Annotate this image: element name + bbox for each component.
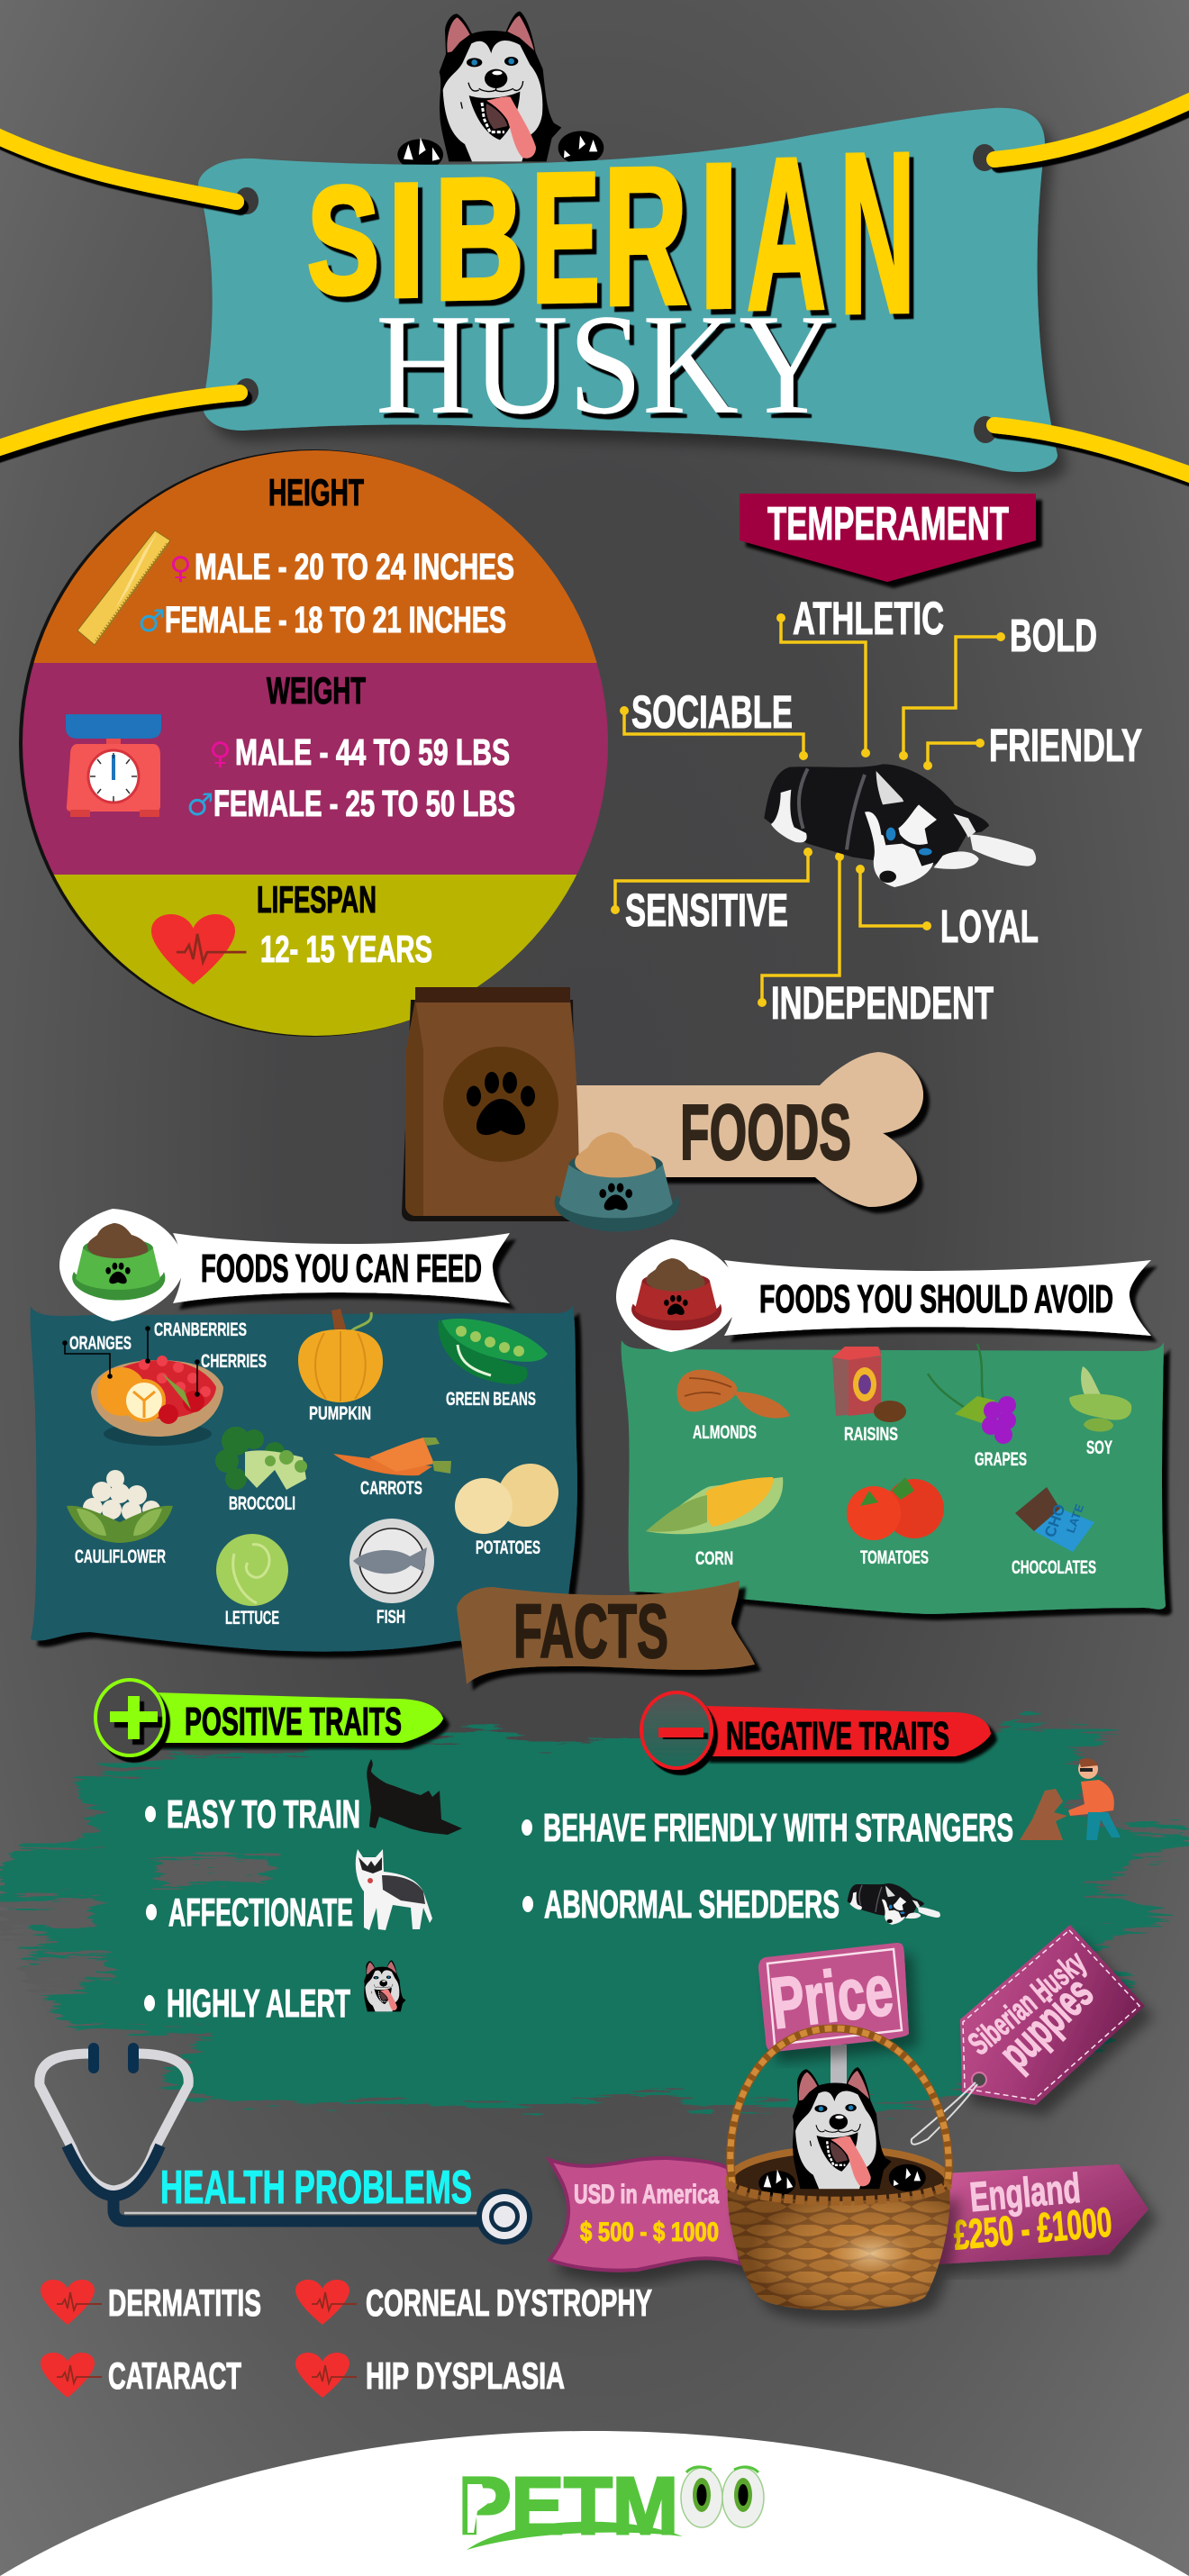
bone label: FOODS bbox=[680, 1089, 851, 1176]
female weight: FEMALE - 25 TO 50 LBS bbox=[213, 783, 515, 824]
pumpkin: PUMPKIN bbox=[309, 1403, 371, 1424]
carrots: CARROTS bbox=[360, 1478, 422, 1499]
cauliflower bbox=[67, 1470, 173, 1567]
temperament trait labels and connectors bbox=[611, 593, 1142, 1029]
weight heading: WEIGHT bbox=[267, 669, 366, 712]
icon: shedding puppy bbox=[848, 1883, 940, 1925]
facts brush background bbox=[0, 1719, 1189, 2111]
icon: standing husky bbox=[356, 1849, 432, 1930]
cherries label: CHERRIES bbox=[201, 1351, 267, 1372]
chocolate: LATE bbox=[1064, 1502, 1086, 1535]
corneal dystrophy bbox=[295, 2280, 652, 2325]
female height bbox=[138, 599, 506, 640]
cataract: CATARACT bbox=[108, 2354, 241, 2397]
usd flag bbox=[549, 2158, 740, 2271]
male height bbox=[169, 546, 514, 587]
basket interior bbox=[729, 2149, 948, 2214]
independent: INDEPENDENT bbox=[771, 977, 994, 1029]
almonds bbox=[677, 1370, 790, 1443]
female weight bbox=[186, 783, 515, 824]
easy to train: EASY TO TRAIN bbox=[167, 1792, 360, 1837]
bone label bbox=[576, 1052, 923, 1207]
husky in basket bbox=[758, 2067, 926, 2196]
loyal: LOYAL bbox=[940, 901, 1039, 952]
tag: siberian husky puppies: puppies bbox=[990, 1967, 1103, 2079]
soy: SOY bbox=[1086, 1438, 1112, 1458]
raisins box bbox=[832, 1347, 906, 1445]
stethoscope bbox=[40, 2043, 532, 2245]
basket bbox=[728, 2184, 950, 2310]
athletic bbox=[776, 593, 944, 757]
sensitive bbox=[611, 848, 812, 936]
dermatitis: DERMATITIS bbox=[108, 2281, 261, 2324]
title: SIBERIAN: S bbox=[307, 155, 379, 327]
cauliflower: CAULIFLOWER bbox=[75, 1547, 166, 1567]
icon: kitchen scale bbox=[66, 714, 161, 817]
banner: foods you can feed bbox=[173, 1233, 510, 1303]
banner: foods you should avoid bbox=[724, 1260, 1151, 1336]
chocolate bbox=[1012, 1487, 1096, 1578]
usd flag: $ 500 - $ 1000 bbox=[580, 2218, 719, 2247]
female height: FEMALE - 18 TO 21 INCHES bbox=[165, 599, 506, 640]
grapes: GRAPES bbox=[975, 1449, 1027, 1470]
pumpkin bbox=[298, 1309, 383, 1424]
icon: ruler bbox=[77, 531, 170, 645]
friendly bbox=[923, 720, 1142, 771]
soy bbox=[1069, 1366, 1131, 1458]
positive traits badge: POSITIVE TRAITS bbox=[185, 1700, 402, 1744]
england flag bbox=[937, 2164, 1148, 2264]
sensitive: SENSITIVE bbox=[625, 884, 788, 936]
tomatoes: TOMATOES bbox=[860, 1547, 929, 1568]
negative traits badge: NEGATIVE TRAITS bbox=[726, 1714, 949, 1758]
bold: BOLD bbox=[1010, 610, 1097, 661]
grapes bbox=[928, 1344, 1027, 1470]
male weight: ♀ bbox=[209, 736, 231, 772]
england flag: England bbox=[967, 2164, 1083, 2220]
hip dysplasia: HIP DYSPLASIA bbox=[366, 2354, 565, 2397]
price group bbox=[549, 1925, 1148, 2310]
foods heading: bag, bone, bowl bbox=[402, 987, 923, 1231]
temperament banner: TEMPERAMENT bbox=[767, 498, 1009, 550]
fruit bowl bbox=[91, 1356, 223, 1446]
hip dysplasia bbox=[295, 2353, 565, 2398]
height heading: HEIGHT bbox=[268, 471, 364, 513]
chocolate: CHOCOLATES bbox=[1012, 1557, 1096, 1578]
icon: husky head bbox=[364, 1960, 406, 2011]
fish on a plate: FISH bbox=[377, 1607, 405, 1628]
basket handle bbox=[731, 2028, 948, 2184]
dermatitis bbox=[41, 2280, 261, 2325]
title: SIBERIAN: E bbox=[531, 134, 600, 341]
fish on a plate bbox=[349, 1519, 434, 1628]
carrots bbox=[333, 1438, 451, 1499]
stats circle bbox=[0, 441, 631, 1046]
icon: black dog silhouette bbox=[367, 1759, 462, 1835]
husky puppy lying down bbox=[764, 764, 1036, 887]
icon: man shaking paw with dog bbox=[1020, 1758, 1121, 1840]
text: N bbox=[840, 104, 915, 361]
behave friendly with strangers bbox=[522, 1758, 1121, 1850]
usd flag: USD in America bbox=[574, 2180, 719, 2209]
sociable bbox=[620, 686, 808, 760]
facts ribbon: FACTS bbox=[513, 1589, 668, 1673]
footer white curve bbox=[0, 2431, 1189, 2576]
cranberries label: CRANBERRIES bbox=[154, 1320, 247, 1340]
raisins box: RAISINS bbox=[844, 1424, 898, 1445]
sociable: SOCIABLE bbox=[631, 686, 793, 738]
broccoli bbox=[215, 1427, 307, 1514]
icon: red bowl badge bbox=[616, 1239, 740, 1352]
title: SIBERIAN bbox=[307, 104, 915, 361]
green beans: GREEN BEANS bbox=[446, 1389, 536, 1410]
chocolate: CHO bbox=[1041, 1501, 1069, 1539]
male weight bbox=[209, 731, 510, 773]
male weight: MALE - 44 TO 59 LBS bbox=[235, 731, 510, 773]
panel: foods you can feed bbox=[31, 1306, 577, 1652]
lettuce: LETTUCE bbox=[225, 1608, 279, 1628]
highly alert bbox=[144, 1960, 406, 2026]
abnormal shedders: ABNORMAL SHEDDERS bbox=[544, 1882, 840, 1927]
potatoes bbox=[455, 1452, 571, 1558]
title: SIBERIAN: R bbox=[604, 126, 687, 347]
corneal dystrophy: CORNEAL DYSTROPHY bbox=[366, 2281, 652, 2324]
banner: foods you can feed: FOODS YOU CAN FEED bbox=[201, 1247, 482, 1291]
almonds: ALMONDS bbox=[693, 1422, 757, 1443]
facts ribbon bbox=[457, 1581, 755, 1684]
loyal bbox=[856, 865, 1039, 952]
corn bbox=[646, 1477, 783, 1569]
positive traits badge bbox=[95, 1680, 443, 1755]
panel: foods you should avoid bbox=[622, 1340, 1166, 1614]
title: SIBERIAN: I bbox=[698, 120, 740, 351]
title: SIBERIAN: I bbox=[387, 150, 425, 331]
broccoli: BROCCOLI bbox=[229, 1493, 295, 1514]
husky peeking above the banner bbox=[397, 12, 604, 170]
lettuce bbox=[216, 1534, 288, 1628]
yellow ropes bbox=[0, 97, 1189, 477]
female weight: ♂ bbox=[186, 787, 213, 823]
lifespan value: 12- 15 YEARS bbox=[260, 928, 432, 970]
affectionate bbox=[146, 1849, 432, 1935]
corn: CORN bbox=[695, 1548, 733, 1569]
tomatoes bbox=[847, 1477, 944, 1568]
green beans bbox=[439, 1319, 548, 1410]
potatoes: POTATOES bbox=[476, 1537, 540, 1558]
icon: heart with pulse bbox=[151, 914, 246, 984]
bold bbox=[899, 610, 1097, 760]
health problems heading: HEALTH PROBLEMS bbox=[160, 2162, 472, 2214]
price sign bbox=[758, 1943, 909, 2052]
independent bbox=[758, 852, 994, 1029]
negative traits badge bbox=[641, 1692, 991, 1768]
temperament banner bbox=[740, 494, 1036, 582]
logo: petmoo: PETM bbox=[458, 2462, 678, 2552]
oranges label: ORANGES bbox=[69, 1333, 132, 1354]
teal dog bowl bbox=[555, 1132, 679, 1231]
athletic: ATHLETIC bbox=[793, 593, 944, 644]
title: HUSKY: HUSKY bbox=[376, 284, 835, 444]
title: SIBERIAN: A bbox=[747, 112, 826, 355]
affectionate: AFFECTIONATE bbox=[168, 1891, 353, 1935]
cataract bbox=[41, 2353, 241, 2398]
price sign: Price bbox=[767, 1949, 897, 2044]
lifespan heading: LIFESPAN bbox=[257, 878, 377, 921]
dog food bag bbox=[402, 987, 579, 1221]
easy to train bbox=[145, 1759, 462, 1837]
connector lines for fruit labels bbox=[63, 1327, 199, 1396]
male height: MALE - 20 TO 24 INCHES bbox=[195, 546, 514, 587]
highly alert: HIGHLY ALERT bbox=[167, 1982, 350, 2026]
title banner bbox=[0, 97, 1189, 477]
tag: siberian husky puppies bbox=[912, 1925, 1145, 2145]
male height: ♀ bbox=[169, 550, 192, 586]
female height: ♂ bbox=[138, 603, 165, 639]
icon: green bowl badge bbox=[59, 1209, 184, 1321]
pole bbox=[830, 2045, 847, 2099]
tag: siberian husky puppies: Siberian Husky bbox=[961, 1943, 1093, 2062]
title: SIBERIAN: B bbox=[434, 141, 524, 336]
